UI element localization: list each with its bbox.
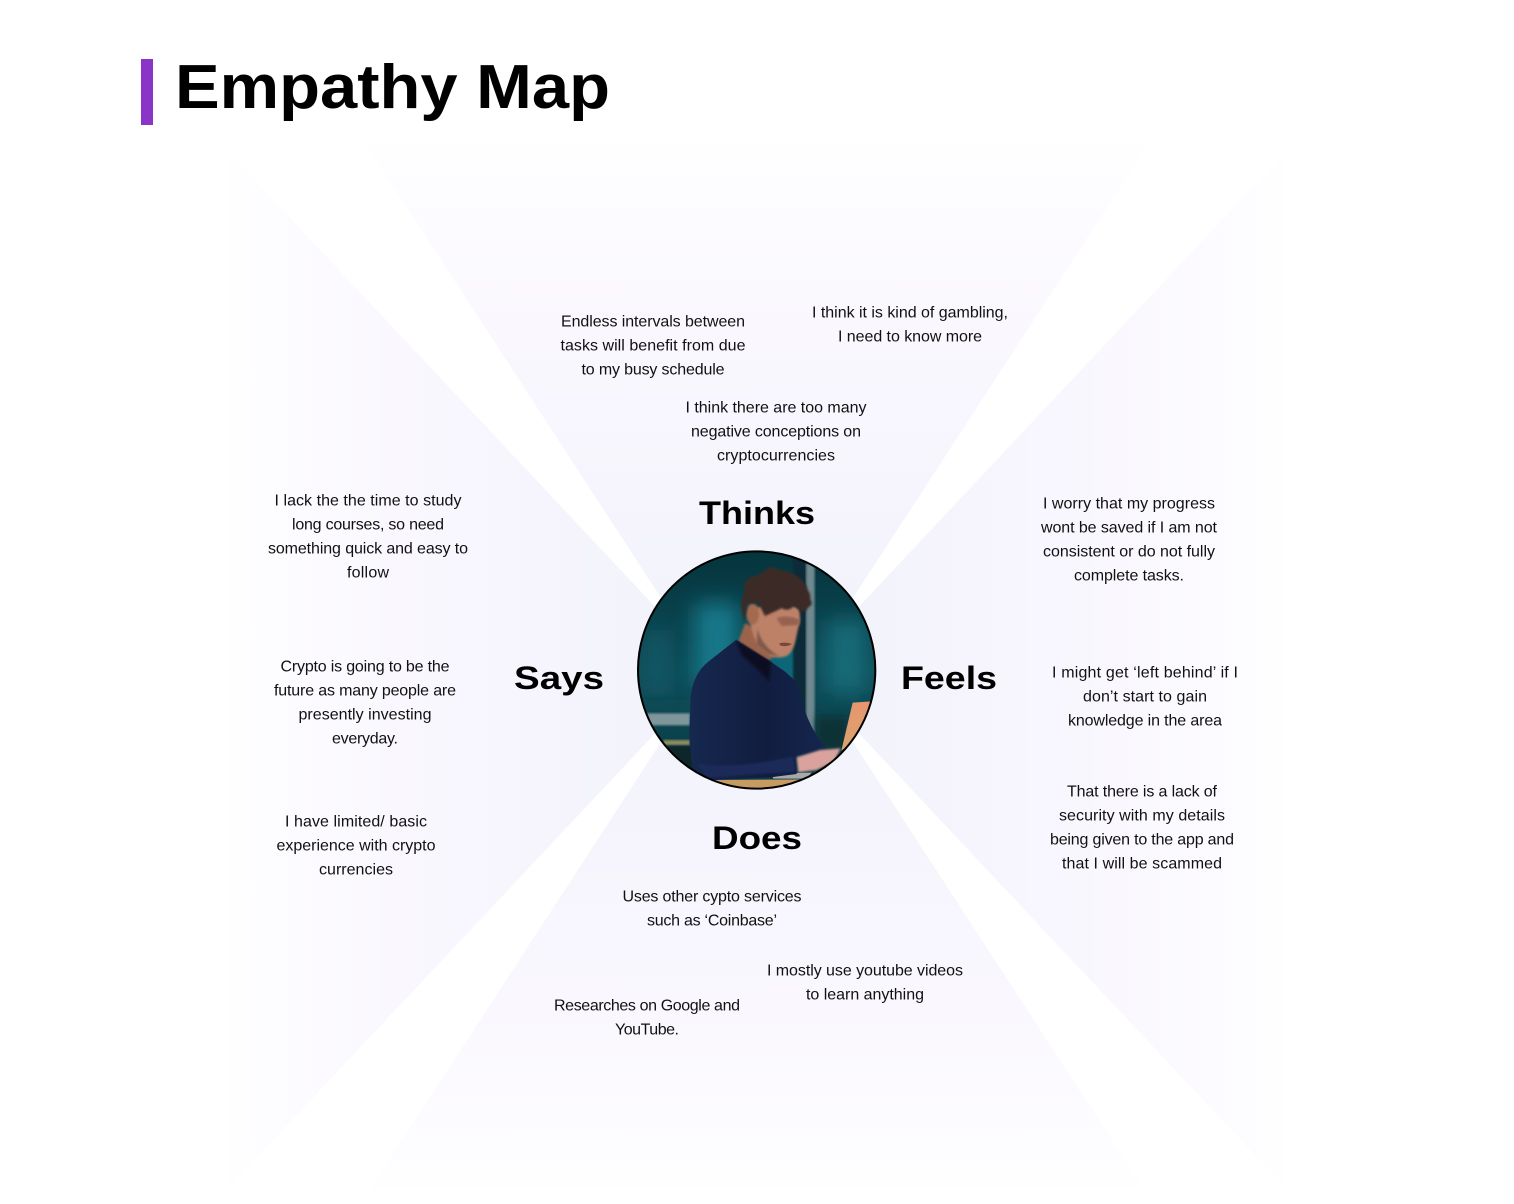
thinks note: negative conceptions: cryptocurrencies bbox=[717, 448, 835, 464]
empathy map quadrants background bbox=[217, 140, 1297, 1200]
portrait ring bbox=[638, 551, 875, 789]
says note: lack of time: follow bbox=[347, 564, 389, 582]
panel centre bbox=[693, 647, 821, 693]
panel: thinks bbox=[363, 140, 1151, 647]
feels note: security: That there is a lack of bbox=[1067, 784, 1218, 800]
heading: says: Says bbox=[514, 660, 604, 696]
says note: lack of time: something quick and easy to bbox=[268, 540, 468, 558]
says note: limited experience: experience with crypto bbox=[276, 838, 436, 854]
feels note: progress: consistent or do not fully bbox=[1043, 544, 1215, 560]
thinks note: negative conceptions: I think there are too many bbox=[686, 400, 866, 416]
says note: crypto future: Crypto is going to be the bbox=[280, 658, 450, 676]
feels note: progress bbox=[1040, 496, 1218, 584]
does note: other services: Uses other cypto services bbox=[622, 888, 802, 906]
says note: lack of time: I lack the the time to study bbox=[274, 492, 462, 510]
title accent bar bbox=[141, 59, 153, 125]
feels note: left behind: I might get ‘left behind’ if I bbox=[1052, 664, 1238, 682]
title bbox=[141, 53, 610, 125]
panel: says bbox=[217, 140, 693, 1200]
hand bbox=[797, 748, 841, 772]
says note: limited experience: currencies bbox=[319, 862, 393, 878]
does note: youtube: I mostly use youtube videos bbox=[767, 962, 963, 980]
says note: crypto future: presently investing bbox=[298, 706, 432, 724]
says note: lack of time bbox=[268, 492, 468, 582]
ear bbox=[746, 603, 759, 625]
thinks note: intervals: to my busy schedule bbox=[582, 362, 725, 378]
feels note: security: security with my details bbox=[1059, 808, 1225, 824]
thinks note: intervals: Endless intervals between bbox=[561, 314, 745, 330]
thinks note: negative conceptions: negative conceptions on bbox=[691, 424, 861, 440]
thinks note: intervals bbox=[560, 314, 746, 378]
feels note: progress: wont be saved if I am not bbox=[1040, 520, 1218, 536]
does note: other services: such as ‘Coinbase’ bbox=[647, 912, 777, 930]
heading: thinks: Thinks bbox=[699, 495, 815, 531]
central portrait photo illustration bbox=[637, 550, 876, 790]
title text: Empathy Map bbox=[175, 53, 610, 122]
table bbox=[715, 779, 800, 788]
feels note: security: that I will be scammed bbox=[1062, 856, 1222, 872]
neck bbox=[738, 623, 777, 662]
heading: feels: Feels bbox=[901, 660, 997, 696]
says note: limited experience bbox=[276, 814, 436, 878]
feels note: progress: complete tasks. bbox=[1074, 568, 1184, 584]
panel: feels bbox=[821, 140, 1297, 1200]
does note: youtube: to learn anything bbox=[806, 986, 924, 1004]
hair bbox=[741, 567, 812, 623]
feels note: security bbox=[1050, 784, 1234, 872]
feels note: left behind: don’t start to gain bbox=[1083, 688, 1207, 706]
panel: does bbox=[363, 693, 1151, 1200]
does note: research: Researches on Google and bbox=[554, 998, 740, 1014]
does note: research: YouTube. bbox=[615, 1022, 679, 1038]
face bbox=[751, 603, 800, 657]
does note: other services bbox=[622, 888, 802, 930]
feels note: left behind: knowledge in the area bbox=[1068, 712, 1222, 730]
thinks note: gambling bbox=[812, 304, 1008, 346]
feels note: security: being given to the app and bbox=[1050, 832, 1234, 848]
says note: lack of time: long courses, so need bbox=[292, 516, 444, 534]
laptop screen bbox=[841, 701, 871, 751]
laptop base bbox=[772, 773, 812, 779]
feels note: progress: I worry that my progress bbox=[1043, 496, 1215, 512]
thinks note: gambling: I need to know more bbox=[838, 328, 982, 346]
thinks note: gambling: I think it is kind of gambling, bbox=[812, 304, 1008, 322]
heading: does: Does bbox=[712, 820, 802, 856]
says note: crypto future bbox=[274, 658, 456, 748]
says note: limited experience: I have limited/ basic bbox=[285, 814, 427, 830]
does note: youtube bbox=[767, 962, 963, 1004]
mouth bbox=[779, 643, 792, 646]
feels note: left behind bbox=[1052, 664, 1238, 730]
says note: crypto future: everyday. bbox=[332, 730, 398, 748]
says note: crypto future: future as many people are bbox=[274, 682, 456, 700]
thinks note: intervals: tasks will benefit from due bbox=[560, 338, 746, 354]
does note: research bbox=[554, 998, 740, 1038]
sweater bbox=[689, 640, 827, 781]
thinks note: negative conceptions bbox=[686, 400, 866, 464]
